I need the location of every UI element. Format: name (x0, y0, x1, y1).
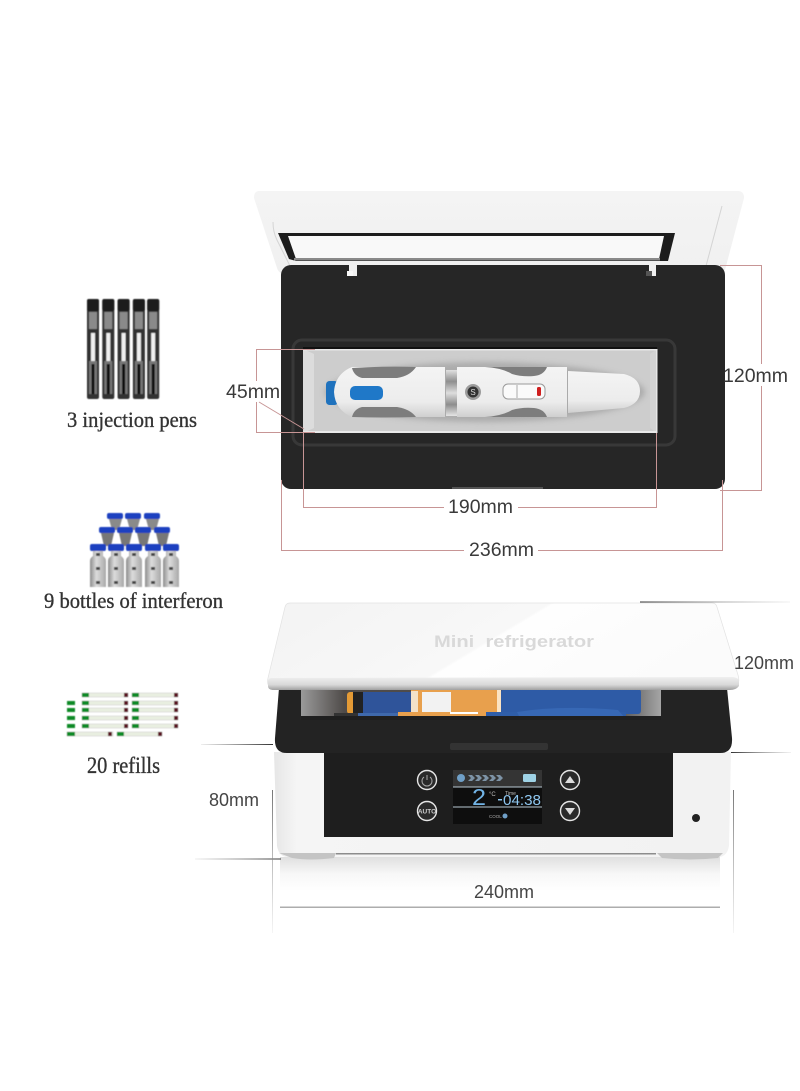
insulin pen back (347, 689, 641, 714)
dimension: 120mm lid depth: 120mm (734, 653, 794, 673)
upper black band (275, 688, 732, 753)
front handle recess (450, 743, 548, 750)
power button (418, 770, 436, 790)
up button (560, 770, 580, 790)
pen rear body (334, 367, 445, 417)
LCD display: Time (505, 791, 516, 797)
front view: refrigerator (195, 602, 794, 933)
hinges (347, 265, 656, 276)
black front panel (324, 750, 673, 837)
item: injection pens (67, 299, 197, 432)
floor shadow (280, 857, 720, 891)
dimension: 190mm tray length: 190mm (448, 496, 513, 518)
insulin pen front (334, 708, 626, 718)
dimension: 45mm tray height (226, 350, 315, 432)
refills icon group (67, 693, 178, 736)
LCD display: °C (489, 792, 496, 798)
pen blue button (350, 386, 383, 400)
dimension: 236mm width: 236mm (469, 539, 534, 561)
dimension: 120mm depth: 120mm (723, 365, 788, 387)
LCD display: 2 (472, 784, 486, 810)
dimension: 80mm height: 80mm (209, 790, 259, 810)
pen dial (465, 384, 481, 400)
vials icon group (90, 513, 179, 587)
pen slider (503, 384, 545, 399)
dimension: 190mm tray length (304, 433, 656, 518)
side sensor (692, 814, 700, 822)
dimension: 236mm width (282, 480, 722, 561)
tray surround (293, 340, 675, 445)
pen dial: S (470, 388, 476, 397)
down button (560, 802, 580, 820)
storage tray (303, 347, 658, 433)
pens icon group (87, 299, 159, 399)
LCD display: 04:38 (503, 792, 541, 809)
LCD display: COOL (489, 814, 502, 819)
lid mirror frame (278, 233, 675, 261)
LCD display (453, 770, 542, 824)
vials label: 9 bottles of interferon (44, 588, 223, 613)
dimension: 120mm depth (720, 266, 788, 490)
top view: open refrigerator (226, 191, 788, 561)
pen front body (457, 367, 567, 417)
pen blue end cap (326, 381, 338, 405)
black body panel (281, 265, 725, 489)
pens label: 3 injection pens (67, 407, 197, 432)
control buttons (418, 770, 580, 820)
front latch (452, 487, 543, 489)
auto button: AUTO (418, 808, 436, 816)
interior opening (301, 688, 661, 718)
pen tip (568, 371, 640, 413)
lancing pen device (326, 367, 640, 418)
refills label: 20 refills (87, 753, 160, 778)
dimension: 45mm tray height: 45mm (226, 381, 280, 403)
base feet (279, 853, 723, 860)
auto button (418, 802, 436, 820)
white base body (274, 752, 731, 857)
logo text: Mini refrigerator (434, 632, 594, 651)
pen metal ring (446, 370, 457, 416)
glass lid (268, 603, 739, 690)
dimension: 240mm width: 240mm (474, 882, 534, 902)
item: interferon bottles (44, 513, 223, 613)
dimension: 80mm height (195, 744, 281, 860)
item: refills (67, 693, 178, 778)
open lid (254, 191, 744, 274)
